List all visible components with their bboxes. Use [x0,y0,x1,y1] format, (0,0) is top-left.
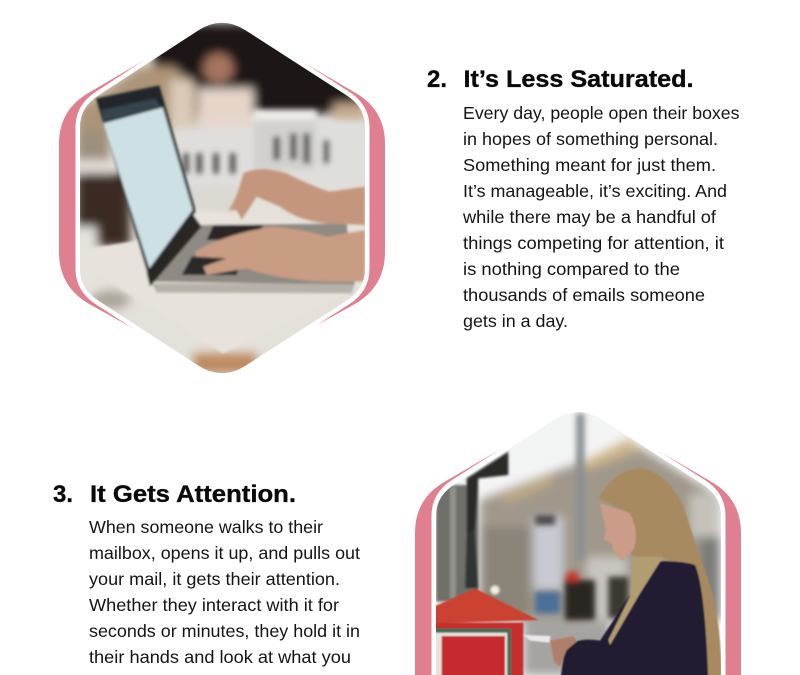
step 2 body text: things competing for attention, it [463,233,724,253]
step 2 heading: 2. [427,66,447,93]
white photo frame [432,407,726,675]
step 3 heading: 3. [53,481,73,508]
step 2 body text [462,103,740,331]
step 3 body text: When someone walks to their [89,517,323,537]
step 2 body text: while there may be a handful of [462,207,716,227]
step 3 body text: your mail, it gets their attention. [89,569,340,589]
photo: woman reading mail beside red mailbox [433,413,722,675]
step 3 body text [89,517,360,667]
white photo frame [80,23,365,373]
mailbox [433,588,538,623]
step 3 heading: It Gets Attention. [90,481,296,508]
hexagon photo: woman at mailbox [415,407,741,675]
step 2 body text: thousands of emails someone [463,285,705,305]
photo: hands typing on laptop [77,23,367,373]
step 3 body text: Whether they interact with it for [89,595,339,615]
laptop [152,223,355,285]
hands [228,169,365,225]
step 2 body text: It’s manageable, it’s exciting. And [463,181,727,201]
step 2 body text: Something meant for just them. [463,155,716,175]
pink hexagon backing [415,440,741,675]
woman [598,468,722,675]
pink hexagon backing [59,51,385,346]
step 2 body text: is nothing compared to the [463,259,680,279]
step 3 body text: mailbox, opens it up, and pulls out [89,543,360,563]
step 3 body text: their hands and look at what you [89,647,351,667]
step 2 body text: Every day, people open their boxes [463,103,740,123]
step 2 heading: It’s Less Saturated. [464,66,694,93]
step 2 body text: in hopes of something personal. [463,129,718,149]
step 3 body text: seconds or minutes, they hold it in [89,621,360,641]
step 2 body text: gets in a day. [463,311,568,331]
hexagon photo: laptop [59,23,385,373]
